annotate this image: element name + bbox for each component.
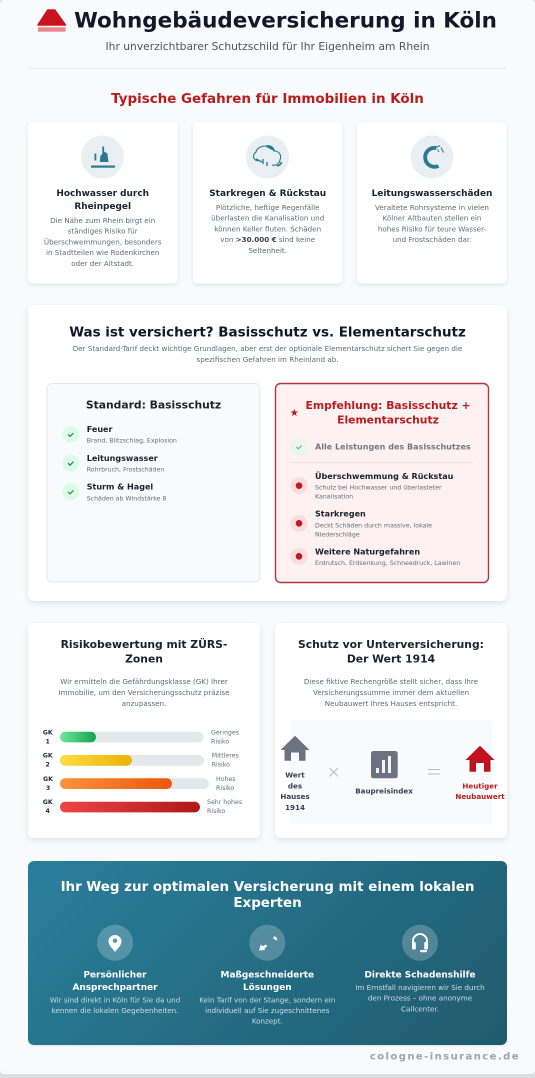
recommended heading: Empfehlung: Basisschutz + (306, 399, 470, 412)
risk text: Wir ermitteln die Gefährdungsklasse (GK) Ihrer (60, 677, 228, 686)
card text: Veraltete Rohrsysteme in vielen (375, 203, 489, 212)
item: flood and backflow: Überschwemmung & Rückstau (315, 471, 454, 481)
bar: GK1: 1 (46, 738, 50, 746)
value heading: Schutz vor Unterversicherung: (298, 638, 484, 651)
step: tailored solutions: Lösungen (243, 983, 292, 993)
step: tailored solutions: Kein Tarif von der Stange, sondern ein (199, 995, 335, 1004)
icon: flood (81, 136, 124, 178)
step: claims help: den Prozess – ohne anonyme (368, 994, 473, 1003)
panel: hazard pipe water (357, 122, 506, 284)
bar: GK3 (43, 776, 236, 792)
risk heading (61, 637, 227, 665)
intro text: Der Standard-Tarif deckt wichtige Grundlagen, aber erst der optionale Elementarschutz sichert Sie gegen die (73, 344, 463, 353)
step: tailored solutions: Maßgeschneiderte (221, 970, 314, 980)
item: fire: Brand, Blitzschlag, Explosion (87, 438, 177, 445)
value heading (298, 638, 484, 665)
panel: standard cover (47, 384, 260, 582)
panel: risk zones (28, 623, 260, 838)
heading: what is insured: Was ist versichert? Basisschutz vs. Elementarschutz (69, 326, 466, 340)
label: new build value: Neubauwert (455, 792, 505, 801)
step: tailored solutions: individuell auf Sie zugeschnittenes (205, 1006, 330, 1015)
bar: GK1: Risiko (211, 738, 229, 746)
step: claims help: Direkte Schadenshilfe (364, 970, 476, 980)
recommended heading (306, 399, 470, 426)
bar: GK4: GK (43, 799, 54, 806)
step: personal contact: Wir sind direkt in Köln für Sie da und (50, 995, 180, 1004)
card title: Starkregen & Rückstau (209, 189, 326, 199)
value heading: Der Wert 1914 (347, 652, 435, 665)
card text: von >30.000 € sind keine (220, 235, 316, 244)
recommended heading: Elementarschutz (337, 413, 439, 426)
item: pipe water: Leitungswasser (87, 454, 158, 463)
step: tailored solutions (199, 925, 335, 1026)
risk text (59, 677, 230, 708)
card text (211, 203, 324, 255)
formula (280, 720, 505, 824)
card title: Rheinpegel (74, 202, 131, 212)
card title: Leitungswasserschäden (372, 189, 492, 199)
expert heading: Experten (233, 896, 302, 911)
panel: coverage comparison (28, 305, 507, 601)
item: flood and backflow: Schutz bei Hochwasser und überlasteter (315, 485, 442, 492)
card text: Kölner Altbauten stellen ein (383, 214, 481, 223)
item: fire: Feuer (87, 425, 113, 434)
card text: Seltenheit. (248, 246, 287, 255)
card text: in Stadtteilen wie Rodenkirchen (46, 248, 159, 257)
item: pipe water (62, 454, 164, 474)
label: value 1914: 1914 (285, 803, 305, 812)
item: pipe water: Rohrbruch, Frostschäden (87, 466, 164, 474)
value text: Neubauwert Ihres Hauses entspricht. (325, 699, 457, 708)
icon: cloud with rain (246, 136, 289, 178)
expert heading: Ihr Weg zur optimalen Versicherung mit einem lokalen (61, 880, 474, 895)
item: storm: Sturm & Hagel (87, 483, 153, 492)
bar chart: risk classes (43, 730, 242, 815)
intro text (73, 344, 463, 364)
label: value 1914 (280, 771, 310, 812)
item: storm (62, 483, 166, 502)
value text (304, 677, 479, 708)
step: claims help: Im Ernstfall navigieren wir Sie durch (355, 983, 485, 992)
equals sign (428, 770, 440, 774)
card text: Plötzliche, heftige Regenfälle (216, 203, 320, 212)
bar: GK2: Risiko (212, 762, 230, 769)
risk text: Immobilie, um den Versicherungsschutz präzise (59, 688, 230, 697)
bar: GK1 (43, 730, 239, 746)
item: other natural hazards: Erdrutsch, Erdsenkung, Schneedruck, Lawinen (315, 560, 460, 567)
item: other natural hazards: Weitere Naturgefahren (315, 547, 420, 556)
label: price index: Baupreisindex (355, 787, 413, 796)
card text: oder der Altstadt. (71, 259, 134, 268)
bar: GK2: GK (43, 753, 54, 760)
multiply sign (330, 768, 338, 776)
panel: value 1914 (275, 623, 507, 838)
icon: headset (402, 925, 438, 961)
section heading: typical hazards: Typische Gefahren für Immobilien in Köln (111, 92, 424, 107)
card title: Hochwasser durch (56, 189, 149, 199)
value text: Diese fiktive Rechengröße stellt sicher, dass Ihre (304, 677, 479, 686)
item: heavy rain: Niederschläge (315, 532, 360, 538)
step: personal contact: kennen die lokalen Gegebenheiten. (52, 1006, 178, 1015)
icon: grey house (280, 736, 310, 761)
card text (375, 203, 489, 244)
card text: Überschwemmungen, besonders (44, 237, 162, 246)
intro text: spezifischen Gefahren im Rheinland ab. (196, 355, 339, 364)
risk text: anzupassen. (122, 699, 166, 708)
panel: local expert (28, 861, 507, 1045)
label: value 1914: Wert (285, 771, 305, 780)
icon: pipe (410, 136, 454, 178)
bar: GK1: Geringes (211, 730, 239, 736)
step: personal contact: Ansprechpartner (72, 983, 158, 993)
card text: überlasten die Kanalisation und (211, 214, 324, 223)
icon: tailored arrows (249, 925, 285, 961)
label: value 1914: Hauses (280, 792, 310, 801)
icon: price index (371, 751, 398, 778)
bar: GK4: Sehr hohes (207, 799, 242, 806)
item: other natural hazards (291, 547, 460, 567)
bar: GK3: 3 (46, 785, 50, 792)
card title (56, 189, 149, 212)
bar: GK4 (43, 799, 242, 815)
step: claims help (355, 925, 485, 1014)
footer domain: cologne-insurance.de (370, 1052, 520, 1062)
step: personal contact: Persönlicher (83, 970, 147, 980)
bar: GK3: Risiko (216, 785, 234, 792)
header icon: red roof (38, 10, 66, 32)
label: value 1914: des (288, 782, 302, 790)
step: claims help: Callcenter. (401, 1004, 439, 1014)
subtitle: Ihr unverzichtbarer Schutzschild für Ihr Eigenheim am Rhein (105, 40, 430, 53)
panel: hazard heavy rain (193, 122, 342, 284)
bar: GK3: GK (43, 776, 54, 783)
bar: GK2: 2 (46, 762, 50, 769)
standard heading: Standard: Basisschutz (86, 398, 221, 412)
label: new build value (455, 781, 505, 801)
item: heavy rain: Deckt Schäden durch massive, lokale (315, 522, 432, 529)
card text: und Frostschäden dar. (393, 235, 471, 244)
card text: hohes Risiko für teure Wasser- (378, 224, 487, 233)
item: heavy rain: Starkregen (315, 510, 366, 519)
icon: map pin (97, 925, 133, 961)
card text: Die Nähe zum Rhein birgt ein (50, 216, 155, 225)
panel: hazard flood (28, 122, 178, 284)
title: Wohngebäudeversicherung in Köln (74, 9, 497, 34)
risk heading: Risikobewertung mit ZÜRS- (61, 637, 227, 651)
icon: star: ★ (290, 408, 299, 419)
card text: ständiges Risiko für (68, 227, 138, 236)
item: all basic services: Alle Leistungen des Basisschutzes (315, 442, 471, 451)
bar: GK4: 4 (46, 808, 51, 815)
bar: GK3: Hohes (216, 776, 236, 783)
bar: GK2 (43, 753, 239, 769)
step: personal contact (50, 925, 180, 1015)
bar: GK2: Mittleres (212, 753, 239, 760)
step: tailored solutions: Konzept. (252, 1017, 283, 1026)
bar: GK1: GK (43, 730, 54, 736)
card text (44, 216, 162, 268)
item: fire (62, 425, 177, 445)
item: heavy rain (291, 510, 432, 538)
panel: recommended cover (276, 384, 488, 582)
item: storm: Schäden ab Windstärke 8 (87, 495, 166, 502)
label: new build value: Heutiger (462, 781, 498, 790)
card text: können Keller fluten. Schäden (214, 224, 321, 233)
item: flood and backflow: Kanalisation (315, 494, 353, 501)
risk heading: Zonen (125, 652, 163, 665)
icon: red house (466, 746, 494, 772)
value text: Versicherungssumme immer dem aktuellen (313, 688, 469, 697)
item: flood and backflow (291, 471, 454, 501)
expert heading (61, 880, 474, 911)
bar: GK4: Risiko (207, 808, 225, 815)
item: all basic services (291, 438, 471, 455)
